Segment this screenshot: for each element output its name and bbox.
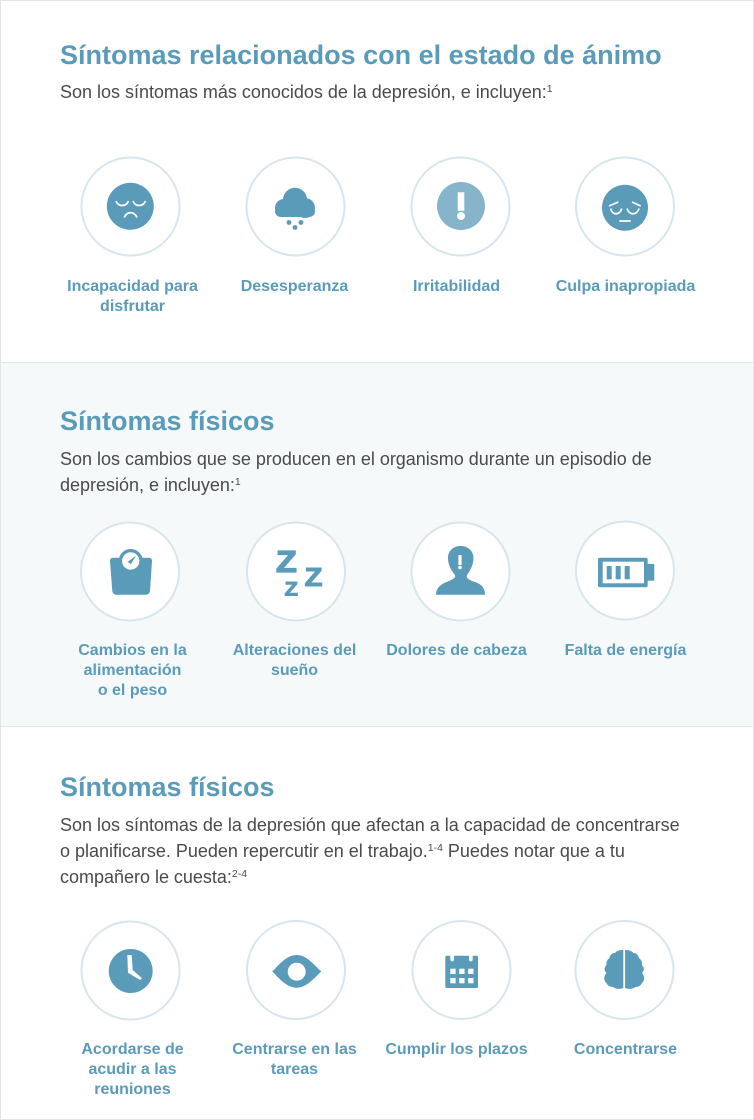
panel: physical symptoms	[0, 362, 754, 727]
icon: sleep Z: Z	[305, 564, 322, 592]
label: Cambios en la alimentación o el peso	[78, 642, 187, 699]
icon: cloud	[246, 158, 344, 256]
label: Alteraciones del sueño: Alteraciones del	[233, 642, 356, 659]
panel: cognitive symptoms	[0, 726, 754, 1120]
label: Cambios en la alimentación o el peso: Cambios en la	[78, 642, 187, 659]
label: Incapacidad para disfrutar: Incapacidad para	[67, 278, 198, 295]
heading: cognitive: Síntomas físicos	[60, 772, 275, 802]
label: Incapacidad para disfrutar: disfrutar	[100, 298, 165, 315]
text: mood intro: Son los síntomas más conocidos de la depresión, e incluyen:1	[60, 82, 553, 102]
text: cognitive intro: Son los síntomas de la depresión que afectan a la capacidad de concentrarse	[60, 815, 680, 835]
text: cognitive intro: compañero le cuesta:2-4	[60, 867, 247, 887]
label: Culpa inapropiada: Culpa inapropiada	[556, 278, 695, 295]
panel: mood symptoms	[0, 0, 754, 363]
heading: mood: Síntomas relacionados con el estado de ánimo	[60, 40, 662, 70]
text: physical intro	[60, 449, 652, 495]
label: Desesperanza: Desesperanza	[241, 278, 348, 295]
heading: physical: Síntomas físicos	[60, 406, 275, 436]
label: Cumplir los plazos: Cumplir los plazos	[385, 1041, 528, 1058]
label: Irritabilidad: Irritabilidad	[413, 278, 500, 295]
label: Acordarse de acudir a las reuniones: reuniones	[94, 1081, 171, 1098]
label: Incapacidad para disfrutar	[67, 278, 198, 315]
label: Cambios en la alimentación o el peso: alimentación	[84, 662, 181, 679]
label: Acordarse de acudir a las reuniones: acudir a las	[88, 1061, 177, 1078]
text: cognitive intro: o planificarse. Pueden repercutir en el trabajo.1-4 Puedes notar que a tu	[60, 841, 625, 861]
text: cognitive intro	[60, 815, 680, 887]
icon: sleep Z: Z	[276, 544, 297, 579]
label: Cambios en la alimentación o el peso: o el peso	[98, 682, 167, 699]
icon: sleep Z	[247, 522, 345, 620]
text: physical intro: depresión, e incluyen:1	[60, 475, 241, 495]
label: Centrarse en las tareas: tareas	[271, 1061, 318, 1078]
label: Acordarse de acudir a las reuniones: Acordarse de	[81, 1041, 184, 1058]
label: Acordarse de acudir a las reuniones	[81, 1041, 184, 1098]
label: Concentrarse: Concentrarse	[574, 1041, 677, 1058]
icon: battery	[576, 522, 674, 620]
label: Alteraciones del sueño: sueño	[271, 662, 318, 679]
text: physical intro: Son los cambios que se producen en el organismo durante un episodio de	[60, 449, 652, 469]
icon: sleep Z: Z	[285, 578, 298, 600]
icon: exclamation	[412, 158, 510, 256]
icon: scale	[81, 522, 179, 620]
label: Dolores de cabeza: Dolores de cabeza	[386, 642, 527, 659]
icon: sad face	[82, 158, 180, 256]
icon: clock	[82, 922, 180, 1020]
label: Centrarse en las tareas	[232, 1041, 357, 1078]
icon: eye	[247, 921, 345, 1019]
icon: calendar	[412, 921, 510, 1019]
icon: head	[412, 522, 510, 620]
icon: guilty face	[576, 158, 674, 256]
label: Falta de energía: Falta de energía	[565, 642, 686, 659]
label: Centrarse en las tareas: Centrarse en las	[232, 1041, 357, 1058]
label: Alteraciones del sueño	[233, 642, 356, 679]
icon: brain	[576, 921, 674, 1019]
